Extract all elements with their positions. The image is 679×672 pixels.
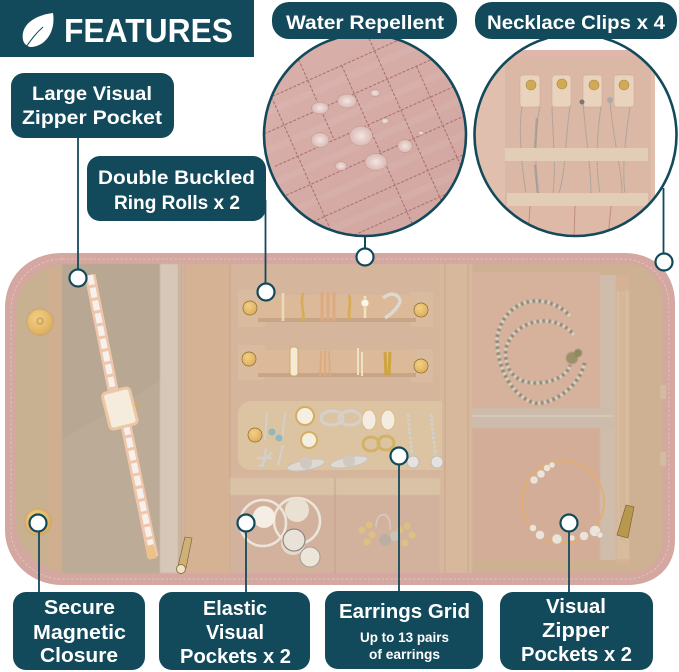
- bracelets: twisted silver: [497, 301, 585, 403]
- banner: features: [0, 0, 254, 57]
- callout: secure magnetic closure: Closure: [40, 645, 118, 667]
- large zipper pocket: [62, 264, 184, 573]
- callout: elastic visual pockets: [159, 592, 310, 670]
- connector: necklace clips: [656, 188, 672, 270]
- ring roll 2: [238, 345, 433, 382]
- connector: elastic pockets: [238, 514, 254, 592]
- callout: double buckled ring rolls: Double Buckled: [98, 167, 255, 189]
- callout: elastic visual pockets: Pockets x 2: [180, 646, 291, 668]
- heading: FEATURES: [64, 12, 233, 49]
- callout: necklace clips: Necklace Clips x 4: [487, 12, 665, 34]
- callout: visual zipper pockets: Visual: [546, 596, 606, 618]
- callout: secure magnetic closure: Secure: [44, 597, 115, 619]
- connector: visual zipper pockets: [560, 514, 578, 592]
- callout: elastic visual pockets: Elastic: [203, 598, 267, 620]
- elastic visual pockets: [230, 478, 440, 573]
- callout: large visual zipper pocket: Zipper Pocket: [22, 107, 163, 129]
- callout: visual zipper pockets: Zipper: [542, 620, 609, 642]
- callout: water repellent: [272, 2, 457, 39]
- zipper pull right: [617, 505, 634, 538]
- callout: double buckled ring rolls: Ring Rolls x 2: [114, 192, 240, 214]
- callout: earrings grid: [325, 591, 483, 669]
- callout: large visual zipper pocket: [11, 73, 174, 138]
- right flap base: [472, 264, 663, 573]
- callout: necklace clips: [475, 2, 677, 39]
- rings: [290, 347, 390, 376]
- left flap with magnets: [16, 264, 62, 573]
- earrings: [257, 407, 443, 473]
- elastic bands: [505, 148, 648, 161]
- connector: earrings grid: [390, 448, 408, 592]
- icon: leaf: [23, 13, 53, 47]
- rings: [283, 292, 400, 321]
- connector: water repellent: [356, 236, 374, 266]
- pocket contents: flower earrings: [358, 515, 416, 546]
- callout: earrings grid: of earrings: [369, 647, 440, 662]
- watch: [90, 275, 157, 560]
- centre panel: [230, 264, 440, 478]
- callout: double buckled ring rolls: [87, 156, 266, 221]
- left inner panel: [185, 264, 230, 573]
- zipper pull left: [176, 537, 192, 574]
- organizer: open jewelry case: [5, 253, 675, 585]
- earrings grid: [238, 401, 443, 473]
- callout: earrings grid: Earrings Grid: [339, 601, 470, 623]
- water droplets: [311, 90, 424, 170]
- callout: water repellent: Water Repellent: [286, 12, 445, 34]
- stitching: [11, 259, 669, 579]
- connector: large visual zipper pocket: [70, 138, 86, 286]
- clip tabs: [520, 75, 634, 107]
- callout: secure magnetic closure: [13, 592, 145, 670]
- callout: secure magnetic closure: Magnetic: [33, 622, 126, 644]
- pocket contents: buttons and hoops: [240, 498, 320, 567]
- ring roll 1: [238, 290, 433, 327]
- panel: necklace clips close-up circle: [472, 34, 676, 240]
- necklace chains: [520, 100, 630, 193]
- bracelet: pearls: [522, 461, 634, 544]
- callout: visual zipper pockets: [500, 592, 653, 670]
- callout: large visual zipper pocket: Large Visual: [32, 83, 152, 105]
- callout: earrings grid: Up to 13 pairs: [360, 630, 449, 645]
- right visual pockets: [472, 272, 666, 565]
- panel: water repellent close-up circle: [262, 39, 468, 238]
- connector: magnetic closure: [30, 514, 46, 592]
- connector: ring rolls: [258, 200, 274, 300]
- callout: visual zipper pockets: Pockets x 2: [521, 644, 632, 666]
- callout: elastic visual pockets: Visual: [206, 622, 264, 644]
